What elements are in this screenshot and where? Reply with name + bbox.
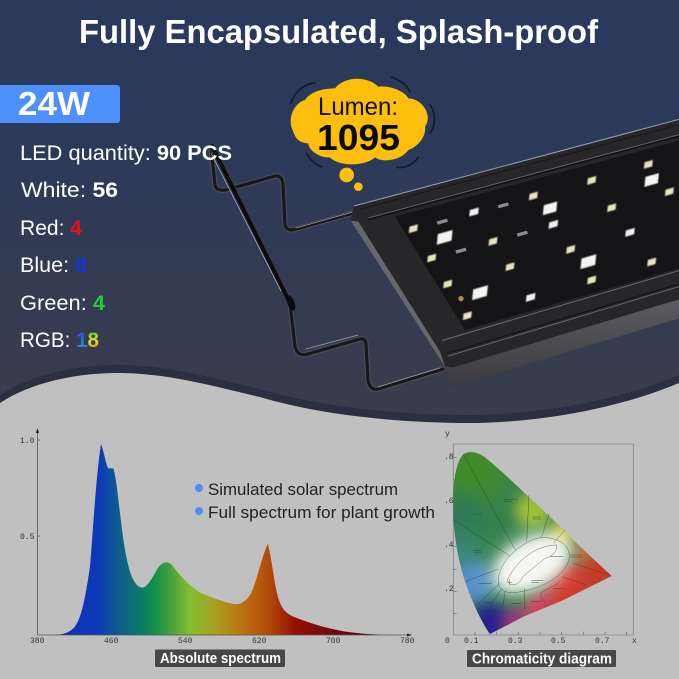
spectrum axis labels bbox=[20, 437, 415, 646]
LED specification list bbox=[20, 142, 232, 352]
badge: 24W: 24W bbox=[18, 85, 91, 122]
spectrum axis labels: 1.0 bbox=[20, 437, 35, 446]
chromaticity axis labels bbox=[444, 430, 637, 646]
chromaticity axis labels: 0.5 bbox=[551, 637, 566, 646]
spectrum axis labels: 460 bbox=[104, 637, 119, 646]
LED light bar bbox=[351, 119, 679, 386]
chromaticity axis labels: 0.1 bbox=[464, 637, 479, 646]
gamut colours bbox=[453, 452, 612, 634]
warm small LEDs bbox=[409, 160, 674, 320]
spectrum area bbox=[50, 444, 400, 635]
lamp end cap bbox=[351, 221, 445, 367]
chromaticity axis labels: x bbox=[632, 637, 637, 646]
lamp front strip bbox=[446, 299, 679, 386]
lumen thought bubble: Lumen: bbox=[318, 93, 398, 121]
LED circuit panel bbox=[395, 141, 679, 330]
chromaticity axis labels: .2 bbox=[444, 585, 454, 594]
cool small LEDs bbox=[469, 207, 635, 302]
spectrum axis labels: 620 bbox=[252, 637, 267, 646]
chromaticity axis labels: y bbox=[445, 430, 450, 439]
spectrum axis labels: 700 bbox=[326, 637, 341, 646]
spectrum axes bbox=[38, 431, 410, 635]
lumen thought bubble bbox=[291, 77, 434, 191]
chromaticity region lines bbox=[454, 454, 610, 610]
spectrum axis labels: 0.5 bbox=[20, 533, 35, 542]
LED specification list: Blue: 8 bbox=[20, 254, 87, 277]
feature bullet list: Full spectrum for plant growth bbox=[208, 503, 435, 522]
chromaticity axis labels: 0.3 bbox=[508, 637, 523, 646]
spectrum axis labels: 540 bbox=[178, 637, 193, 646]
LED specification list: RGB: 18 bbox=[20, 329, 99, 352]
chromaticity axis labels: .4 bbox=[444, 541, 454, 550]
large white LEDs bbox=[437, 173, 659, 300]
frame bbox=[453, 444, 633, 635]
spectrum chart bbox=[20, 428, 415, 646]
label: absolute spectrum: Absolute spectrum bbox=[160, 651, 281, 667]
badge: 24W bbox=[0, 85, 120, 123]
title: Fully Encapsulated, Splash-proof bbox=[79, 13, 599, 50]
LED specification list: Green: 4 bbox=[20, 292, 105, 315]
chromaticity diagram bbox=[437, 430, 637, 650]
chromaticity axis labels: 0.7 bbox=[595, 637, 610, 646]
chromaticity axis labels: .6 bbox=[444, 497, 454, 506]
LED specification list: White: 56 bbox=[21, 179, 118, 202]
lower panel: grey wave with shadow bbox=[0, 365, 679, 679]
label: chromaticity diagram: Chromaticity diagram bbox=[472, 652, 612, 668]
feature bullet list: Simulated solar spectrum bbox=[208, 480, 398, 499]
lamp housing bbox=[351, 119, 679, 386]
feature bullet list bbox=[195, 480, 435, 522]
chromaticity axis labels: .8 bbox=[444, 453, 454, 462]
lumen thought bubble: 1095 bbox=[317, 117, 400, 158]
LED specification list: LED quantity: 90 PCS bbox=[20, 142, 232, 165]
spectrum axis labels: 780 bbox=[400, 637, 415, 646]
gamut region captions bbox=[473, 499, 583, 604]
silkscreen marks bbox=[437, 202, 528, 254]
LED specification list: Red: 4 bbox=[20, 217, 82, 240]
spectrum axis labels: 380 bbox=[30, 637, 45, 646]
mounting bracket wires bbox=[211, 146, 443, 389]
chromaticity axis labels: 0 bbox=[445, 637, 450, 646]
